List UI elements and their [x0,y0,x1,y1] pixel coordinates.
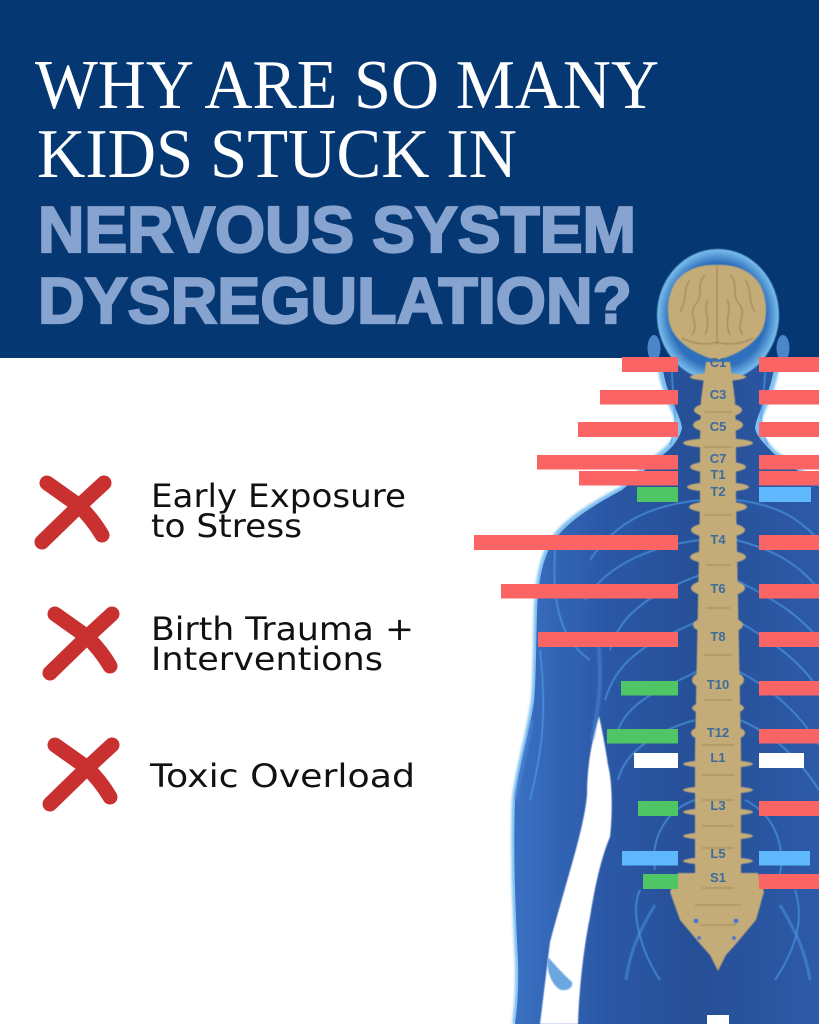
icon: red x [50,614,112,673]
title highlight: nervous system: NERVOUS SYSTEM [38,193,636,266]
body silhouette [511,362,819,1024]
vertebra labels: T6 [710,581,726,596]
title line: kids stuck in: KIDS STUCK IN [37,116,517,193]
text: early exposure to stress [151,477,406,545]
title highlight: dysregulation: DYSREGULATION? [38,264,632,337]
icon: left ear [648,335,660,361]
header band [0,0,819,358]
icon: right ear [776,335,790,361]
title [35,47,659,337]
vertebra labels: L5 [710,846,726,861]
gap between arm and torso [540,716,612,1024]
vertebra labels [707,355,729,885]
vertebra labels: C7 [710,451,726,466]
text: birth trauma + interventions [151,610,414,678]
title line: why are so many: WHY ARE SO MANY [35,47,659,124]
vertebra labels: C3 [710,387,726,402]
right side bars [759,357,819,889]
hand [548,957,572,990]
spinal column [695,362,741,873]
text: toxic overload: Toxic Overload [149,757,415,795]
sacrum [670,873,764,971]
list item: toxic overload [50,745,415,804]
text: early exposure to stress: to Stress [151,507,302,545]
vertebra labels: C5 [710,419,726,434]
vertebra shading [695,412,741,925]
text: early exposure to stress: Early Exposure [151,477,406,515]
vertebra labels: C1 [710,355,726,370]
vertebra labels: T1 [710,467,726,482]
nerve lines [530,372,819,980]
vertebra labels: S1 [710,870,726,885]
icon: red x [42,483,104,542]
list item: early exposure to stress [42,477,406,545]
bottom notch [707,1015,729,1024]
list item: birth trauma and interventions [50,610,414,678]
vertebra labels: T10 [707,677,729,692]
sacral openings [694,918,738,940]
anatomy figure: body with head and spine [511,249,819,1024]
vertebra labels: T2 [710,484,726,499]
text: birth trauma + interventions: Interventions [151,640,383,678]
icon: red x [50,745,112,804]
text: birth trauma + interventions: Birth Trauma + [151,610,414,648]
vertebra labels: T12 [707,725,729,740]
vertebra labels: T8 [710,629,726,644]
brain [668,265,766,360]
left side bars [474,357,678,889]
arm highlight [516,640,600,800]
skull outline [657,249,779,381]
vertebra labels: L3 [710,798,726,813]
spine [670,362,764,971]
vertebra labels: T4 [710,532,726,547]
vertebra labels: L1 [710,750,726,765]
